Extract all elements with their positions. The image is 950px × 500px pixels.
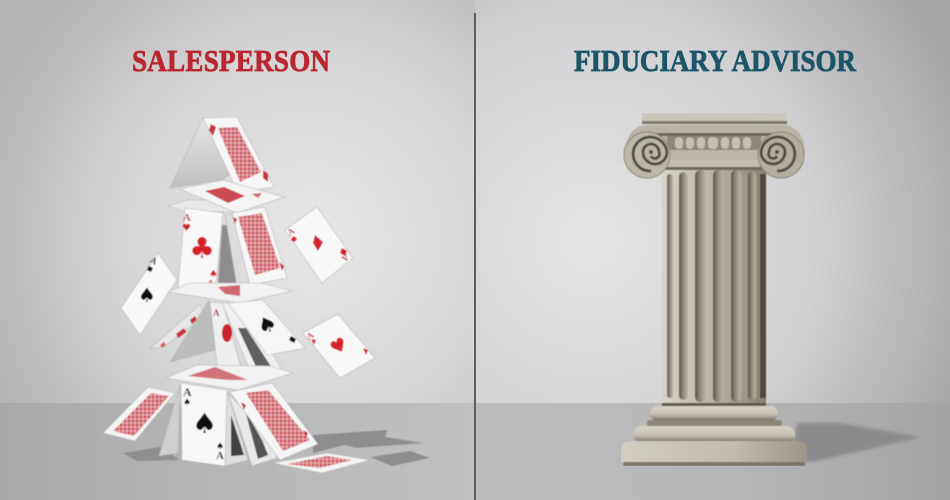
gap shadow between cards: [218, 225, 240, 285]
card: third level gray lean: [170, 300, 215, 362]
card: floating ace of spades: A: [149, 255, 160, 267]
card: ace of spades tilted: [228, 300, 305, 355]
card: floor red back: [273, 453, 370, 473]
column shaft: [662, 166, 766, 407]
card: floating ace of diamonds: A: [339, 252, 351, 264]
card: base king behind: [228, 393, 277, 466]
card: top leaning shade: [170, 118, 236, 188]
left panel background: [0, 0, 475, 500]
card: ace of clubs: ♥: [182, 223, 191, 234]
card: ace of clubs: ♣: [189, 231, 215, 265]
card: base ace of spades: A: [183, 385, 192, 399]
card: base ace of spades: [181, 383, 227, 466]
card: base ace of spades: ♠: [192, 407, 217, 440]
card: base side shade: [225, 390, 248, 466]
card: base red back leaning: [230, 383, 318, 460]
card: second horizontal: [168, 283, 292, 303]
card: ace of clubs: A: [207, 279, 215, 290]
card: third level left back: [150, 304, 204, 349]
illustration: ionic stone column: [621, 113, 922, 466]
column shadow: [790, 423, 922, 462]
heading: fiduciary advisor: FIDUCIARY ADVISOR: [574, 44, 857, 78]
card: third level heart: A: [213, 308, 220, 318]
heading: salesperson: SALESPERSON: [132, 44, 330, 78]
column capital: [625, 113, 805, 170]
card: ace of clubs: A: [183, 212, 191, 224]
left volute: [624, 132, 670, 178]
card: red back leaning: [232, 207, 287, 285]
card: base ace of spades: ♠: [216, 442, 224, 452]
card: third level heart: [210, 302, 241, 373]
illustration: collapsing house of cards: [103, 117, 430, 473]
right volute: [758, 132, 804, 178]
card: ace of clubs: ♠: [209, 269, 218, 280]
card: top red back: [203, 117, 274, 193]
card: floating ace of spades: [121, 253, 177, 335]
center divider line: [474, 13, 476, 500]
card: top horizontal: [180, 180, 284, 213]
card: floating ace of spades: ♠: [138, 283, 156, 307]
card: second level floor: [168, 200, 235, 212]
card: floating ace of diamonds: [285, 207, 353, 283]
card: behind clubs: [225, 213, 260, 293]
card: ace of spades tilted: ♠: [253, 310, 282, 341]
card shadows on floor: [123, 430, 430, 466]
card: floating ace of diamonds: A: [285, 225, 297, 238]
card: third horizontal: [166, 365, 293, 390]
right panel background: [475, 0, 950, 500]
card: king of spades: [222, 303, 282, 378]
card: base gray lean: [159, 385, 180, 456]
card: ace of clubs: [178, 208, 223, 293]
card: base ace of spades: A: [216, 450, 224, 462]
card: floating ace of hearts: A: [304, 329, 316, 342]
card: floating ace of hearts: ♥: [326, 333, 352, 360]
card: left fallen red back: [103, 387, 175, 441]
card: base ace of spades: ♠: [183, 398, 191, 408]
column base: [621, 406, 807, 466]
card: floating ace of hearts: [303, 314, 375, 378]
